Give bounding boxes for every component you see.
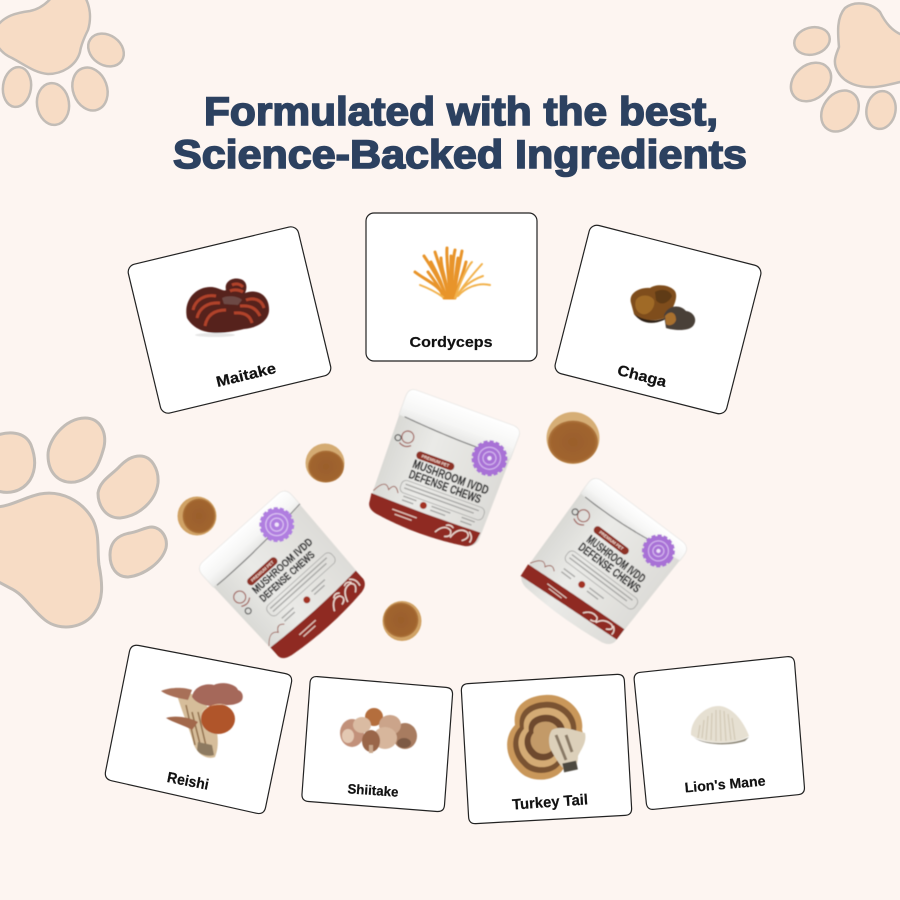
feature icons [281, 579, 329, 623]
label: Shiitake: Shiitake [347, 781, 399, 800]
pill [245, 556, 279, 587]
label: Cordyceps: Cordyceps [410, 334, 492, 351]
jar: right [514, 475, 690, 653]
icon: shiitake mushrooms [340, 708, 417, 753]
purple badge [468, 437, 511, 479]
mascot [393, 427, 416, 448]
card: Turkey Tail [461, 674, 632, 824]
product name: MUSHROOM IVDD [411, 457, 491, 497]
label: Maitake: Maitake [214, 360, 278, 391]
feature icons [560, 567, 605, 603]
icon: chaga [631, 285, 695, 330]
purple badge [637, 530, 679, 572]
band pattern [525, 555, 623, 636]
card: Maitake [127, 225, 332, 415]
band pattern [367, 480, 479, 545]
pill: PREMIUM PET [598, 530, 625, 552]
title: Science-Backed Ingredients [173, 133, 747, 177]
mascot [231, 588, 258, 615]
chew: upper right [546, 412, 600, 464]
icon: lion's mane mushroom [691, 706, 749, 744]
card: Cordyceps [366, 213, 537, 361]
mascot [568, 504, 592, 527]
purple badge [254, 502, 299, 547]
paw: top left [0, 0, 130, 127]
benefits box [265, 551, 337, 618]
icon: turkey tail mushroom [507, 695, 585, 780]
card: Chaga [553, 224, 763, 415]
benefits box [563, 549, 640, 611]
paw: top right [783, 3, 900, 139]
product name: DEFENSE CHEWS [257, 549, 318, 605]
pill [415, 450, 455, 471]
icon: reishi mushroom [161, 683, 243, 758]
band pattern [263, 567, 363, 661]
pill: PREMIUM PET [250, 560, 275, 583]
label: Chaga: Chaga [616, 362, 669, 391]
label: Lion's Mane: Lion's Mane [684, 772, 766, 795]
product name: DEFENSE CHEWS [576, 542, 642, 596]
pill [592, 525, 630, 556]
card: Reishi [105, 645, 292, 814]
jar: left [196, 488, 373, 666]
feature icons [401, 495, 475, 527]
pill: PREMIUM PET [421, 454, 450, 469]
icon: maitake mushroom [186, 279, 269, 337]
jar: centre [363, 387, 522, 554]
lid [580, 475, 690, 566]
product name: MUSHROOM IVDD [584, 534, 647, 586]
title [173, 90, 747, 177]
chew: upper left [306, 444, 344, 482]
red band [270, 571, 371, 665]
product name: DEFENSE CHEWS [407, 467, 483, 506]
product name: MUSHROOM IVDD [250, 536, 315, 597]
label: Reishi: Reishi [166, 769, 210, 794]
lid [196, 488, 303, 588]
label: Turkey Tail: Turkey Tail [512, 791, 589, 814]
icon: cordyceps [415, 248, 490, 298]
card: Shiitake [302, 677, 453, 812]
card: Lion's Mane [634, 657, 804, 809]
chew: lower centre [382, 601, 422, 641]
red band [364, 493, 480, 553]
lid [397, 387, 522, 460]
red band [520, 559, 624, 645]
chew: far left [178, 496, 216, 536]
benefits box [399, 479, 486, 521]
title: Formulated with the best, [204, 90, 718, 134]
product name [576, 533, 649, 596]
paw: left large [0, 418, 166, 627]
